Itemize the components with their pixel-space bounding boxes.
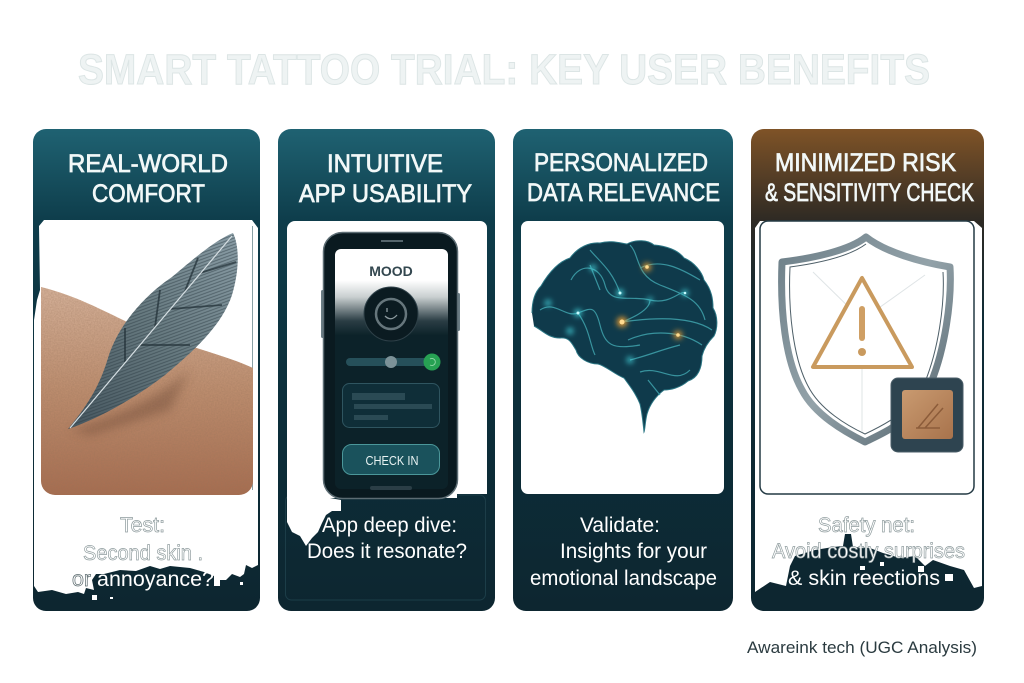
icon: tattoo chip xyxy=(891,378,963,452)
icon: smartphone mood app xyxy=(321,232,460,498)
caption: comfort test xyxy=(72,514,214,591)
caption: app deep dive: App deep dive: xyxy=(322,514,457,537)
button: check in xyxy=(342,444,440,474)
info card xyxy=(342,384,440,428)
heading: personalized data relevance: DATA RELEVANCE xyxy=(527,179,720,207)
label: mood: MOOD xyxy=(369,263,413,279)
caption: validate: Validate: xyxy=(580,514,660,537)
heading: intuitive app usability xyxy=(299,150,472,208)
panel: personalized data relevance xyxy=(513,129,733,611)
caption: validate xyxy=(530,514,717,590)
panel: real-world comfort xyxy=(33,129,260,611)
slider xyxy=(346,354,440,370)
icon: mood face dial xyxy=(364,287,418,341)
heading: intuitive app usability: INTUITIVE xyxy=(327,150,443,178)
caption: comfort test: or annoyance? xyxy=(72,568,214,591)
heading: personalized data relevance xyxy=(527,149,720,207)
caption: safety net: Safety net: xyxy=(818,514,915,537)
image: feather on skin xyxy=(41,225,253,495)
button: check in: CHECK IN xyxy=(366,453,418,468)
title: SMART TATTOO TRIAL: KEY USER BENEFITS xyxy=(78,46,930,94)
source credit: Awareink tech (UGC Analysis) xyxy=(747,638,977,657)
heading: personalized data relevance: PERSONALIZED xyxy=(534,149,708,177)
heading: minimized risk and sensitivity check xyxy=(765,149,974,207)
icon: shield with warning xyxy=(782,237,963,452)
heading: real-world comfort: REAL-WORLD xyxy=(68,150,228,178)
icon: warning triangle xyxy=(813,278,912,367)
heading: real-world comfort xyxy=(68,150,228,208)
caption: comfort test: Test: xyxy=(120,514,165,537)
caption: app deep dive xyxy=(307,514,467,563)
heading: minimized risk and sensitivity check: MINIMIZED RISK xyxy=(775,149,956,177)
caption: safety net xyxy=(772,514,965,590)
panel: minimized risk and sensitivity check xyxy=(751,129,984,611)
panel: intuitive app usability xyxy=(278,129,495,611)
caption: safety net: & skin reections xyxy=(788,567,940,590)
caption: app deep dive: Does it resonate? xyxy=(307,540,467,563)
icon: glowing brain xyxy=(532,241,717,432)
heading: real-world comfort: COMFORT xyxy=(92,180,205,208)
heading: intuitive app usability: APP USABILITY xyxy=(299,180,472,208)
caption: validate: Insights for your xyxy=(560,540,707,563)
caption: safety net: Avoid costly surprises xyxy=(772,540,965,563)
caption: validate: emotional landscape xyxy=(530,567,717,590)
caption: comfort test: Second skin . xyxy=(83,542,203,565)
